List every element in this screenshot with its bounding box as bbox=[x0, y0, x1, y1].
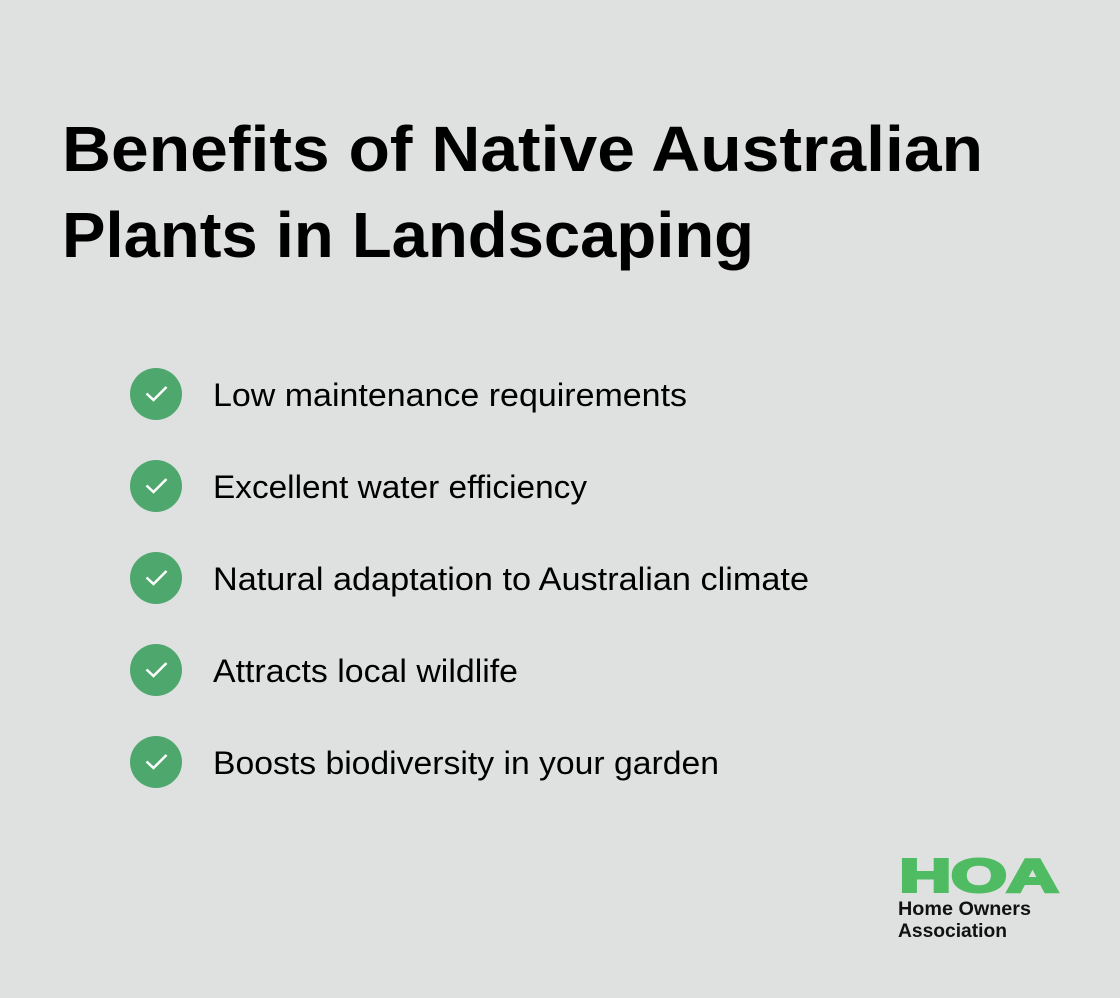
logo: HOA Home Owners Association: Home Owners bbox=[898, 899, 1031, 920]
title: Benefits of Native Australian bbox=[62, 113, 983, 185]
benefits list bbox=[130, 368, 809, 788]
item: low maintenance: Low maintenance requirements bbox=[213, 377, 687, 413]
item: local wildlife: Attracts local wildlife bbox=[213, 653, 518, 689]
logo: HOA Home Owners Association bbox=[898, 850, 1058, 942]
item: water efficiency: Excellent water efficiency bbox=[213, 469, 587, 505]
item: biodiversity: Boosts biodiversity in your garden bbox=[213, 745, 719, 781]
item: water efficiency bbox=[130, 460, 587, 512]
logo: HOA Home Owners Association: Association bbox=[898, 921, 1007, 942]
item: local wildlife bbox=[130, 644, 518, 696]
item: biodiversity bbox=[130, 736, 719, 788]
title bbox=[62, 113, 983, 271]
item: climate adaptation: Natural adaptation to Australian climate bbox=[213, 561, 809, 597]
item: low maintenance bbox=[130, 368, 687, 420]
title: Plants in Landscaping bbox=[62, 199, 754, 271]
item: climate adaptation bbox=[130, 552, 809, 604]
logo: HOA Home Owners Association: HOA bbox=[900, 850, 1058, 902]
